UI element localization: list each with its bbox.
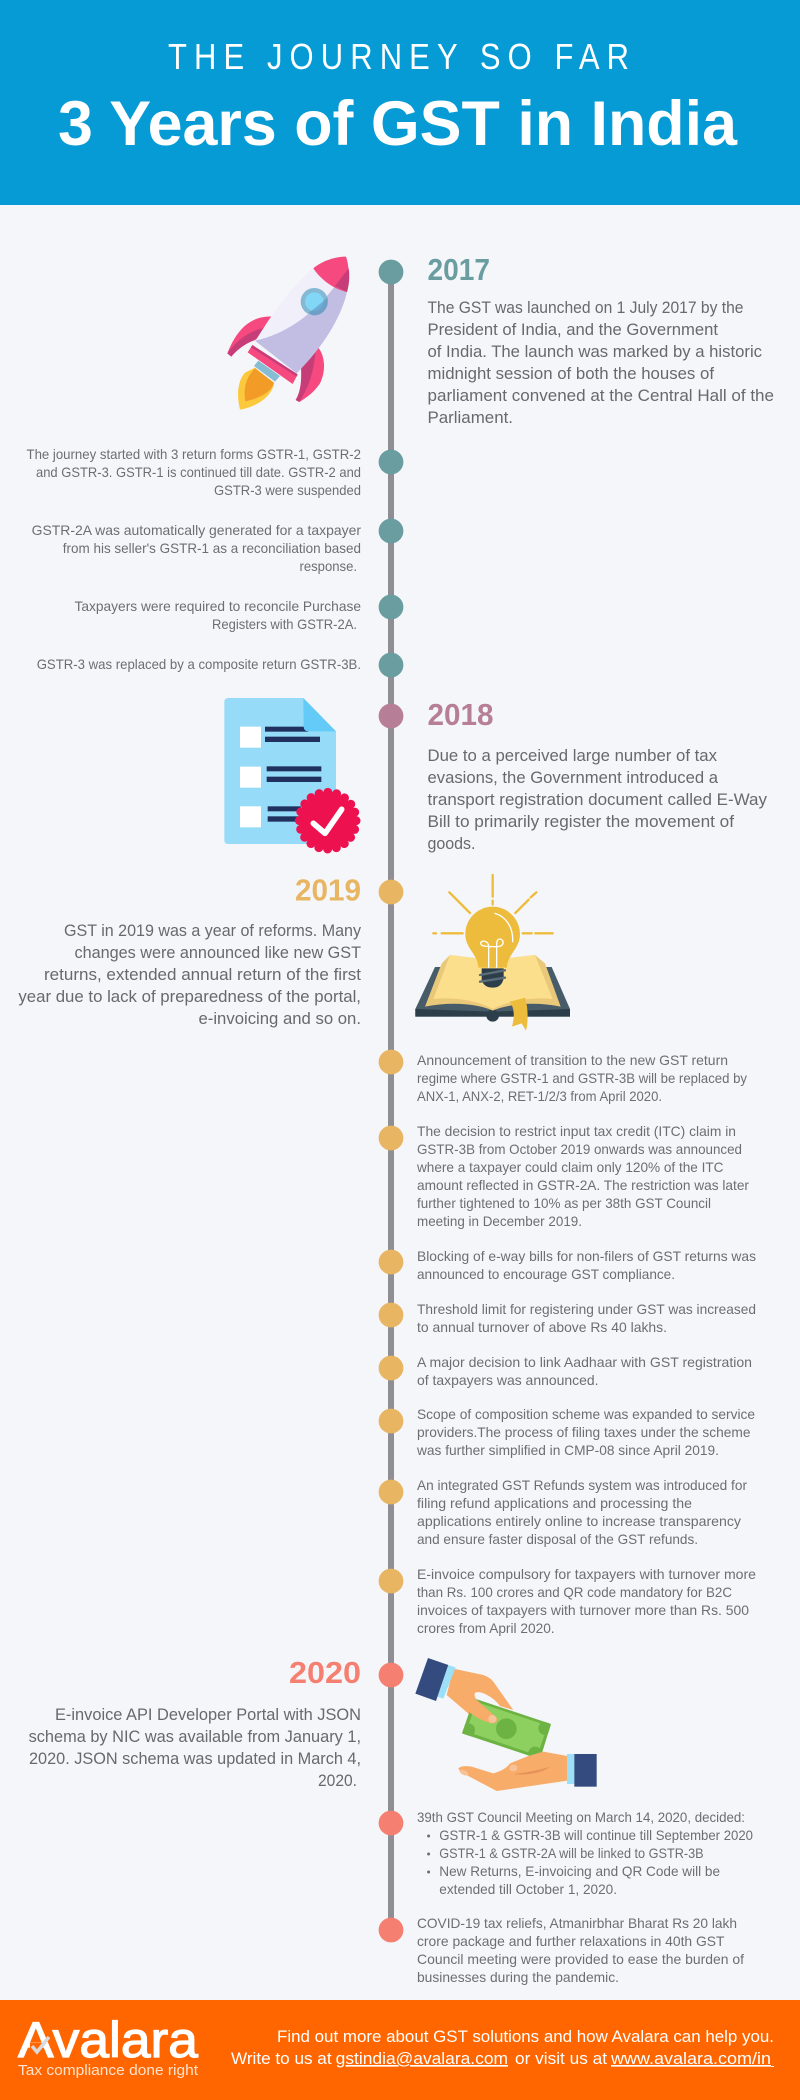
- item: ITC restriction: where a taxpayer could claim only 120% of the ITC: [416, 1160, 724, 1175]
- text: 2019 intro: [18, 922, 362, 1028]
- item: e-way bill blocking: Blocking of e-way bills for non-filers of GST returns was: [417, 1249, 756, 1264]
- text: 2018 intro: evasions, the Government introduced a: [428, 769, 719, 787]
- text: 2020 intro: schema by NIC was available from January 1,: [29, 1728, 361, 1746]
- item: COVID-19 reliefs: Council meeting were provided to ease the burden of: [417, 1952, 744, 1967]
- item: threshold limit: to annual turnover of above Rs 40 lakhs.: [417, 1320, 667, 1335]
- panel: 2019: [18, 872, 570, 1031]
- icon: rocket: [227, 257, 349, 410]
- item: Aadhaar link: of taxpayers was announced.: [417, 1373, 598, 1388]
- item: ITC restriction: meeting in December 2019.: [417, 1214, 582, 1229]
- item: COVID-19 reliefs: [379, 1916, 744, 1985]
- item: e-invoice: crores from April 2020.: [417, 1621, 555, 1636]
- item: Aadhaar link: A major decision to link Aadhaar with GST registration: [417, 1355, 752, 1370]
- item: 39th council meeting: GSTR-1 & GSTR-3B will continue till September 2020: [439, 1828, 753, 1843]
- year: 2017: 2017: [428, 252, 490, 287]
- item: three return forms: GSTR-3 were suspended: [214, 483, 361, 498]
- panel: 2019 milestones: [379, 1050, 756, 1636]
- logo: Avalara: Avalara: [18, 2012, 198, 2068]
- text: 2019 intro: e-invoicing and so on.: [198, 1010, 361, 1028]
- dot: 2019: [379, 880, 403, 904]
- panel: 2020 milestones: [379, 1810, 753, 1985]
- call to action: www.avalara.com/in: [610, 2050, 771, 2068]
- item: e-way bill blocking: [379, 1249, 756, 1282]
- item: ITC restriction: GSTR-3B from October 2019 onwards was announced: [417, 1142, 742, 1157]
- item: e-invoice: [379, 1567, 756, 1636]
- call to action: Write to us at: [231, 2050, 332, 2068]
- panel: 2017 milestones: [26, 447, 403, 677]
- text: 2020 intro: 2020. JSON schema was updated in March 4,: [29, 1750, 361, 1768]
- item: composition scheme: was further simplified in CMP-08 since April 2019.: [416, 1443, 719, 1458]
- item: ITC restriction: [379, 1124, 749, 1229]
- item: 39th council meeting: GSTR-1 & GSTR-2A will be linked to GSTR-3B: [439, 1846, 704, 1861]
- item: e-invoice: than Rs. 100 crores and QR code mandatory for B2C: [417, 1585, 732, 1600]
- subtitle: THE JOURNEY SO FAR: [168, 38, 629, 78]
- item: Aadhaar link: [379, 1355, 752, 1388]
- item: reconcile registers: [74, 595, 403, 632]
- dot: 2020: [379, 1663, 403, 1687]
- item: GSTR-2A: GSTR-2A was automatically generated for a taxpayer: [32, 523, 361, 538]
- year: 2018: 2018: [428, 697, 494, 732]
- item: new return regime: ANX-1, ANX-2, RET-1/2/3 from April 2020.: [417, 1089, 662, 1104]
- item: COVID-19 reliefs: COVID-19 tax reliefs, Atmanirbhar Bharat Rs 20 lakh: [417, 1916, 737, 1931]
- text: 2019 intro: GST in 2019 was a year of reforms. Many: [64, 922, 362, 940]
- title: 3 Years of GST in India: [58, 89, 738, 159]
- item: COVID-19 reliefs: businesses during the pandemic.: [417, 1970, 619, 1985]
- item: threshold limit: Threshold limit for registering under GST was increased: [417, 1302, 756, 1317]
- text: 2018 intro: goods.: [428, 835, 476, 853]
- icon: book and light bulb: [415, 875, 570, 1031]
- text: 2020 intro: [29, 1706, 361, 1790]
- item: refunds system: applications entirely online to increase transparency: [417, 1514, 741, 1529]
- panel: 2020: [29, 1655, 597, 1791]
- footer banner: [0, 2000, 800, 2100]
- item: 39th council meeting: [379, 1810, 753, 1897]
- icon: checklist document: [224, 698, 356, 849]
- item: refunds system: An integrated GST Refunds system was introduced for: [417, 1478, 747, 1493]
- text: 2017 intro: midnight session of both the houses of: [428, 365, 714, 383]
- item: reconcile registers: Registers with GSTR-2A.: [212, 617, 357, 632]
- item: 39th council meeting: New Returns, E-invoicing and QR Code will be: [439, 1864, 720, 1879]
- call to action: gstindia@avalara.com: [336, 2050, 508, 2068]
- tagline: Tax compliance done right: [18, 2062, 199, 2079]
- item: refunds system: filing refund applications and processing the: [417, 1496, 692, 1511]
- item: GSTR-2A: [32, 519, 403, 574]
- year: 2020: 2020: [289, 1655, 361, 1690]
- text: 2018 intro: Bill to primarily register the movement of: [428, 813, 734, 831]
- text: 2019 intro: year due to lack of preparedness of the portal,: [18, 988, 361, 1006]
- dot: 2018: [379, 704, 403, 728]
- text: 2018 intro: [428, 747, 768, 853]
- item: three return forms: The journey started with 3 return forms GSTR-1, GSTR-2: [26, 447, 361, 462]
- text: 2020 intro: 2020.: [318, 1772, 357, 1790]
- text: 2019 intro: changes were announced like new GST: [74, 944, 361, 962]
- item: 39th council meeting: extended till October 1, 2020.: [439, 1882, 617, 1897]
- call to action: Find out more about GST solutions and how Avalara can help you.: [277, 2028, 774, 2046]
- item: refunds system: [379, 1478, 747, 1547]
- item: ITC restriction: amount reflected in GSTR-2A. The restriction was later: [417, 1178, 749, 1193]
- item: composition scheme: Scope of composition scheme was expanded to service: [417, 1407, 755, 1422]
- item: COVID-19 reliefs: crore package and further relaxations in 40th GST: [417, 1934, 724, 1949]
- item: three return forms: [26, 447, 403, 498]
- item: three return forms: and GSTR-3. GSTR-1 is continued till date. GSTR-2 and: [36, 465, 361, 480]
- text: 2017 intro: President of India, and the Government: [428, 321, 718, 339]
- text: 2017 intro: [428, 299, 774, 427]
- item: GSTR-2A: response.: [300, 559, 357, 574]
- item: GSTR-3B: GSTR-3 was replaced by a composite return GSTR-3B.: [37, 657, 361, 672]
- item: e-way bill blocking: announced to encourage GST compliance.: [417, 1267, 675, 1282]
- item: refunds system: and ensure faster disposal of the GST refunds.: [417, 1532, 698, 1547]
- item: new return regime: regime where GSTR-1 and GSTR-3B will be replaced by: [417, 1071, 747, 1086]
- item: reconcile registers: Taxpayers were required to reconcile Purchase: [74, 599, 361, 614]
- year: 2019: 2019: [295, 872, 361, 908]
- header banner: [0, 0, 800, 205]
- dot: 2017: [379, 260, 403, 284]
- item: 39th council meeting: 39th GST Council Meeting on March 14, 2020, decided:: [417, 1810, 745, 1825]
- item: ITC restriction: further tightened to 10% as per 38th GST Council: [417, 1196, 711, 1211]
- item: GSTR-3B: [37, 653, 403, 677]
- call to action: or visit us at: [515, 2050, 607, 2068]
- item: new return regime: Announcement of transition to the new GST return: [417, 1053, 728, 1068]
- item: threshold limit: [379, 1302, 756, 1335]
- panel: 2017: [227, 252, 774, 427]
- call to action: [231, 2028, 774, 2068]
- item: composition scheme: providers.The process of filing taxes under the scheme: [417, 1425, 750, 1440]
- item: GSTR-2A: from his seller's GSTR-1 as a reconciliation based: [63, 541, 361, 556]
- item: e-invoice: invoices of taxpayers with turnover more than Rs. 500: [417, 1603, 749, 1618]
- text: 2019 intro: returns, extended annual return of the first: [44, 966, 361, 984]
- text: 2017 intro: The GST was launched on 1 July 2017 by the: [428, 299, 744, 317]
- text: 2018 intro: Due to a perceived large number of tax: [428, 747, 717, 765]
- text: 2020 intro: E-invoice API Developer Portal with JSON: [55, 1706, 361, 1724]
- text: 2017 intro: Parliament.: [428, 409, 513, 427]
- icon: hands exchanging money: [415, 1658, 597, 1791]
- item: new return regime: [379, 1050, 747, 1104]
- text: 2017 intro: of India. The launch was marked by a historic: [428, 343, 762, 361]
- item: e-invoice: E-invoice compulsory for taxpayers with turnover more: [417, 1567, 756, 1582]
- item: composition scheme: [379, 1407, 755, 1458]
- panel: 2018: [224, 697, 768, 853]
- timeline spine: [388, 272, 394, 1930]
- item: ITC restriction: The decision to restrict input tax credit (ITC) claim in: [417, 1124, 736, 1139]
- text: 2017 intro: parliament convened at the Central Hall of the: [428, 387, 774, 405]
- text: 2018 intro: transport registration document called E-Way: [428, 791, 768, 809]
